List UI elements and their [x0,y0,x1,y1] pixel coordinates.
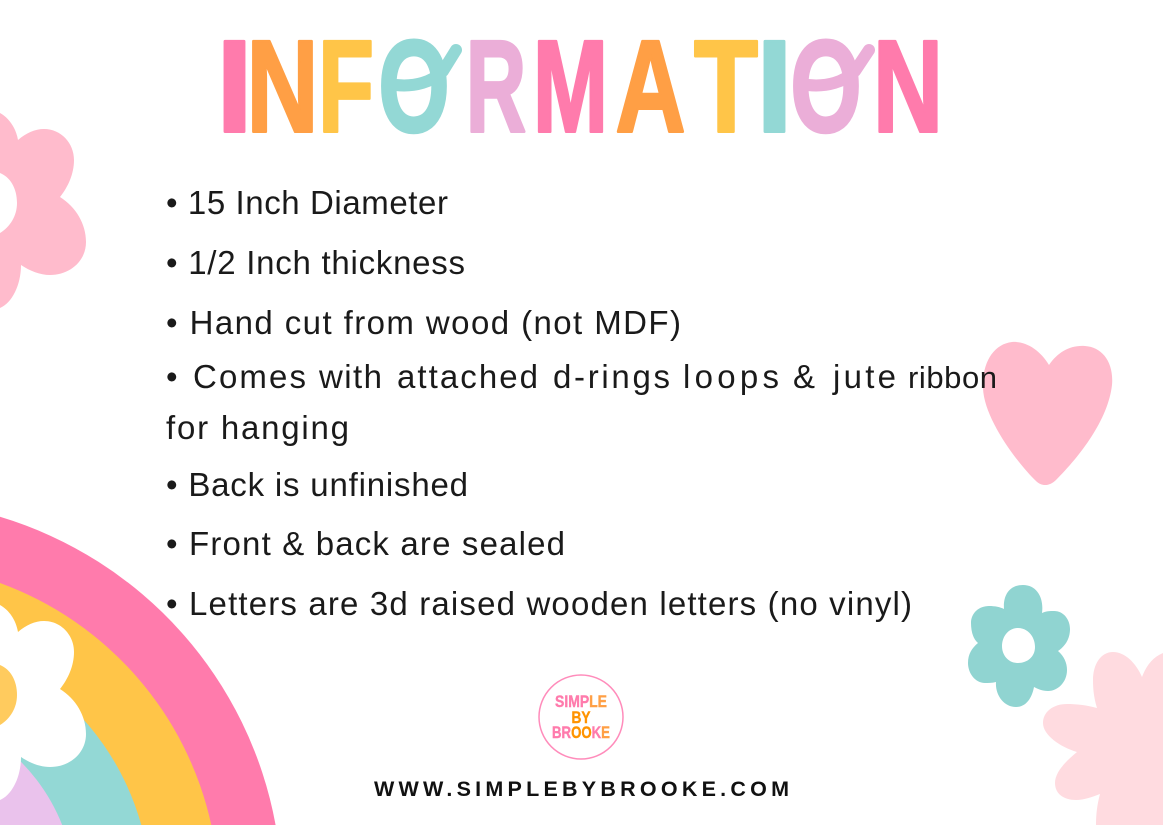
list item: hanging hardware: d-rings [553,358,670,395]
title: R [466,14,526,160]
list item: letters: • Letters are 3d raised wooden letters (no vinyl) [166,585,912,622]
list item: diameter: • 15 Inch Diameter [166,184,448,221]
website url: WWW.SIMPLEBYBROOKE.COM [374,777,789,801]
title: N [247,13,318,160]
rainbow [0,517,276,825]
list item: hanging hardware: with [318,358,382,395]
logo badge [539,675,623,759]
logo badge: BROOKE [552,724,610,742]
list item: material: • Hand cut from wood (not MDF) [166,304,681,341]
title: N [873,14,943,160]
title letter O with slash: O [378,13,450,159]
list item: hanging hardware: loops [683,358,779,395]
title [216,12,943,160]
icon: pink flower top left [0,113,86,308]
title: I [216,12,253,160]
list item: hanging hardware: ribbon [908,360,997,395]
list item: back finish: • Back is unfinished [166,466,468,503]
logo badge: SIMPLE [555,693,607,711]
title: A [615,14,686,160]
list item: hanging hardware: jute [832,358,896,395]
list item: hanging hardware [166,358,997,446]
title letter O with slash: O [790,13,862,159]
icon: heart [983,342,1112,485]
list item: sealing: • Front & back are sealed [166,525,565,562]
icon: pale pink flower [1043,652,1163,825]
title: M [533,13,608,159]
list item: hanging hardware: for hanging [166,409,349,446]
title: F [318,13,374,159]
icon: white flower on rainbow [0,605,86,800]
list item: hanging hardware: & [793,358,815,395]
list item: hanging hardware: • [166,358,178,395]
icon: teal flower [968,585,1070,707]
list item: hanging hardware: Comes [193,358,306,395]
title: I [756,12,793,160]
list item: thickness: • 1/2 Inch thickness [166,244,465,281]
information list [166,184,997,622]
logo badge: BY [572,709,590,727]
list item: hanging hardware: attached [397,358,538,395]
title: T [694,14,758,160]
